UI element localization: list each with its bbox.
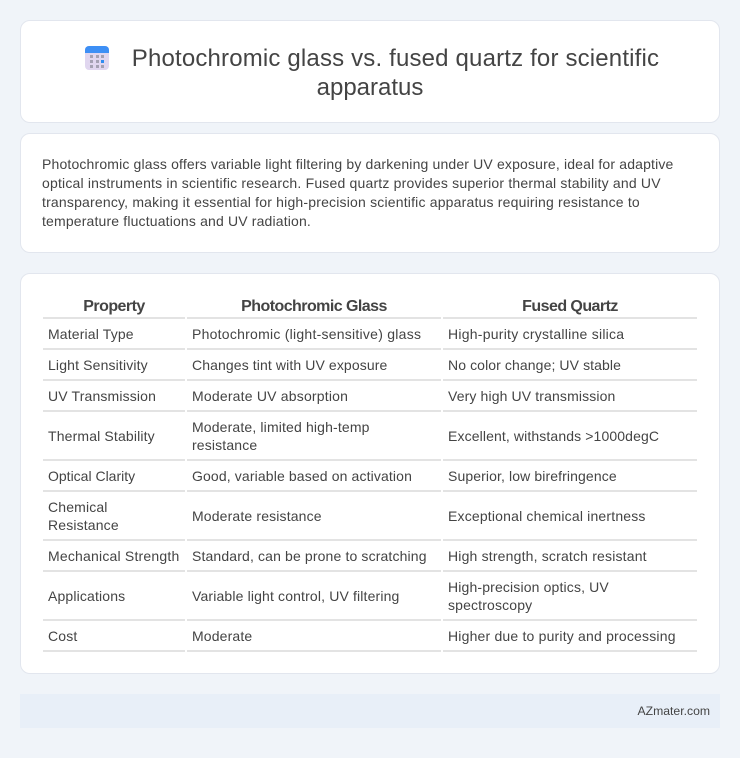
icon: calendar	[85, 46, 109, 70]
comparison table: Applications	[48, 588, 125, 604]
header: Property: Property	[83, 298, 145, 315]
footer text: AZmater.com	[638, 704, 710, 718]
comparison table: Exceptional chemical inertness	[448, 508, 646, 524]
comparison table: Moderate	[192, 628, 252, 644]
title card	[20, 20, 720, 123]
comparison table: resistance	[192, 437, 257, 453]
comparison table: Excellent, withstands >1000degC	[448, 428, 659, 444]
comparison table: Resistance	[48, 517, 119, 533]
title: Photochromic glass vs. fused quartz for scientific	[132, 45, 659, 72]
comparison table: Light Sensitivity	[48, 357, 148, 373]
title	[132, 45, 659, 101]
comparison table: Chemical	[48, 499, 108, 515]
comparison table: Moderate UV absorption	[192, 388, 348, 404]
header: Fused Quartz: Fused Quartz	[522, 298, 618, 315]
comparison table: High-purity crystalline silica	[448, 326, 624, 342]
comparison table: Very high UV transmission	[448, 388, 615, 404]
comparison table: Moderate resistance	[192, 508, 322, 524]
comparison table: Mechanical Strength	[48, 548, 179, 564]
comparison table: High strength, scratch resistant	[448, 548, 647, 564]
intro card	[20, 133, 720, 253]
intro text: optical instruments in scientific research. Fused quartz provides superior thermal stability and UV	[42, 175, 661, 191]
comparison table: No color change; UV stable	[448, 357, 621, 373]
comparison table: Standard, can be prone to scratching	[192, 548, 427, 564]
comparison table: Material Type	[48, 326, 134, 342]
comparison table: spectroscopy	[448, 597, 532, 613]
comparison table: UV Transmission	[48, 388, 156, 404]
intro text: temperature fluctuations and UV radiation.	[42, 213, 311, 229]
header: Photochromic Glass: Photochromic Glass	[241, 298, 387, 315]
comparison table: Superior, low birefringence	[448, 468, 617, 484]
comparison table: Higher due to purity and processing	[448, 628, 676, 644]
footer bar	[20, 694, 720, 728]
comparison table: Good, variable based on activation	[192, 468, 412, 484]
intro text: transparency, making it essential for high-precision scientific apparatus requiring resistance to	[42, 194, 640, 210]
title: apparatus	[317, 74, 423, 101]
comparison table: Cost	[48, 628, 77, 644]
comparison table: Optical Clarity	[48, 468, 135, 484]
comparison table: High-precision optics, UV	[448, 579, 609, 595]
intro text: Photochromic glass offers variable light filtering by darkening under UV exposure, ideal for adaptive	[42, 156, 673, 172]
comparison table: Moderate, limited high-temp	[192, 419, 370, 435]
comparison table: Variable light control, UV filtering	[192, 588, 399, 604]
intro text	[42, 156, 673, 229]
comparison table: Changes tint with UV exposure	[192, 357, 387, 373]
comparison table: Photochromic (light-sensitive) glass	[192, 326, 421, 342]
table card	[20, 273, 720, 674]
comparison table: Thermal Stability	[48, 428, 155, 444]
